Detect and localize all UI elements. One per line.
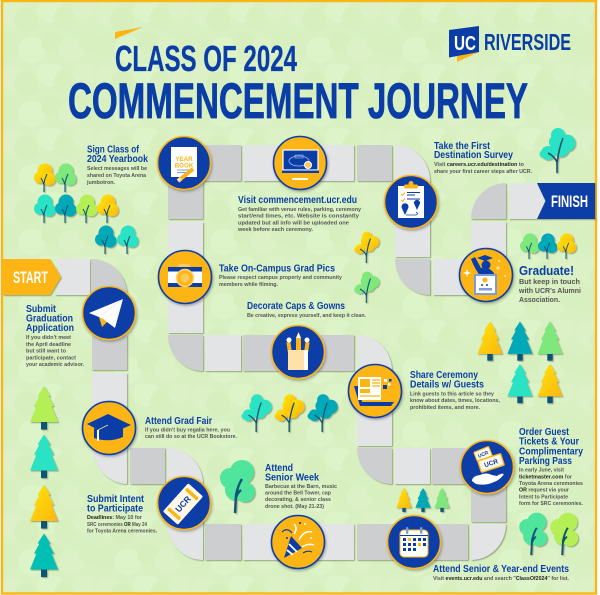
text: sign yearbook xyxy=(86,144,148,186)
title accent swoosh xyxy=(115,27,143,39)
text: attend senior week: drone shot. (May 21-23) xyxy=(265,504,324,510)
text: attend senior week: decorating, & senior class xyxy=(265,497,331,503)
tree: senior week xyxy=(220,460,255,513)
start banner: START xyxy=(13,269,48,287)
icon: yearbook: YEAR xyxy=(175,156,193,163)
text: submit graduation application: but still want to xyxy=(26,348,66,354)
finish banner xyxy=(537,183,595,219)
text: attend senior week: Barbecue at the Barn, music xyxy=(265,484,337,490)
text: sign yearbook: Sign Class of xyxy=(87,144,139,156)
text: share ceremony details: Share Ceremony xyxy=(410,369,478,381)
pine trees: small trio xyxy=(396,488,450,512)
icon: calendar xyxy=(388,516,440,568)
text: submit intent to participate: SRC ceremonies OR May 24 xyxy=(87,522,148,528)
trees: beside graduate xyxy=(520,233,576,259)
text: first destination survey: share your first career steps after UCR. xyxy=(434,169,532,175)
text: attend senior week xyxy=(265,462,337,510)
text: senior and year-end events: Visit events.ucr.edu and search "ClassOf2024" for list. xyxy=(433,576,569,582)
text: first destination survey: Visit careers.ucr.edu/destination to xyxy=(434,162,524,168)
icon: laptop with article xyxy=(348,364,402,418)
icon: pencils in cup xyxy=(272,326,324,378)
icon: tickets in hand: UCR xyxy=(477,450,490,460)
text: submit graduation application: Application xyxy=(26,322,74,334)
text: share ceremony details: prohibited items, and more. xyxy=(410,405,480,411)
text: on-campus grad pics xyxy=(219,262,343,288)
text: attend grad fair: Attend Grad Fair xyxy=(145,415,212,427)
icon: yearbook xyxy=(158,136,210,190)
text: first destination survey: Take the First xyxy=(434,140,490,152)
text: attend senior week: Senior Week xyxy=(265,472,319,484)
text: submit graduation application: participate, contact xyxy=(26,356,76,362)
text: order guest tickets: form for SRC ceremonies. xyxy=(519,501,583,507)
text: order guest tickets: Order Guest xyxy=(519,426,569,438)
text: sign yearbook: 2024 Yearbook xyxy=(87,153,148,165)
text: submit intent to participate: Deadlines: May 10 for xyxy=(87,515,143,521)
text: attend grad fair: If you didn't buy regalia here, you xyxy=(145,428,230,434)
text: visit website xyxy=(237,194,362,233)
icon: tickets in hand xyxy=(460,440,514,494)
text: submit graduation application xyxy=(26,303,84,368)
text: graduate: But keep in touch xyxy=(519,277,580,286)
text: order guest tickets xyxy=(519,426,583,507)
text: attend senior week: around the Bell Tower, cap xyxy=(265,490,331,496)
logo: UC Riverside: UC xyxy=(454,33,476,55)
icon: paper plane xyxy=(82,286,136,340)
pine trees: right grove xyxy=(477,322,563,403)
icon: graduation cap xyxy=(82,402,136,454)
text: sign yearbook: jumbotron. xyxy=(86,180,115,186)
logo: UC Riverside xyxy=(449,26,571,62)
text: share ceremony details xyxy=(410,369,500,411)
text: visit website: updated but all info will be uploaded one xyxy=(238,220,349,226)
text: order guest tickets: Parking Pass xyxy=(519,455,572,467)
title xyxy=(68,27,528,129)
text: sign yearbook: shared on Toyota Arena xyxy=(87,173,147,179)
start banner xyxy=(3,259,61,295)
text: order guest tickets: OR request via your xyxy=(519,488,570,494)
icon: graduate with diploma xyxy=(460,248,512,302)
text: submit intent to participate: for Toyota Arena ceremonies. xyxy=(87,528,157,534)
title line 1: CLASS OF 2024 xyxy=(115,38,297,79)
text: on-campus grad pics: Please respect campus property and community xyxy=(219,275,343,281)
icon: survey clipboard xyxy=(384,176,438,228)
trees: centre pair xyxy=(354,232,379,303)
broadleaf trees: top left grove xyxy=(34,164,138,254)
text: submit graduation application: Submit xyxy=(26,303,56,315)
text: attend grad fair xyxy=(145,415,237,440)
text: share ceremony details: Details w/ Guests xyxy=(410,378,484,390)
text: visit website: week before each ceremony. xyxy=(237,227,313,233)
text: on-campus grad pics: Take On-Campus Grad Pics xyxy=(219,262,335,274)
pine trees: left column xyxy=(30,386,58,577)
text: order guest tickets: Complimentary xyxy=(519,446,583,458)
text: senior and year-end events xyxy=(433,563,569,582)
text: decorate caps and gowns: Be creative, express yourself, and keep it clean. xyxy=(247,313,366,319)
icon: tickets in hand: UCR xyxy=(483,458,499,469)
text: decorate caps and gowns: Decorate Caps & Gowns xyxy=(247,300,345,312)
text: senior and year-end events: Attend Senior & Year-end Events xyxy=(433,563,569,575)
text: sign yearbook: Select messages will be xyxy=(87,166,147,172)
text: on-campus grad pics: members while filming. xyxy=(219,282,278,288)
text: attend grad fair: can still do so at the UCR Bookstore. xyxy=(145,434,237,440)
text: submit intent to participate xyxy=(87,493,157,534)
text: order guest tickets: Toyota Arena ceremonies xyxy=(519,481,583,487)
text: graduate xyxy=(518,263,581,304)
icon: website on monitor xyxy=(274,136,326,190)
text: share ceremony details: know about dates, times, locations, xyxy=(410,398,500,404)
icon: camera xyxy=(158,250,212,304)
text: submit intent to participate: Submit Intent xyxy=(87,493,144,505)
text: graduate: Graduate! xyxy=(519,263,574,278)
text: first destination survey: Destination Survey xyxy=(434,149,513,161)
text: order guest tickets: ticketmaster.com for xyxy=(519,474,573,480)
icon: event ticket: UCR xyxy=(173,494,193,514)
text: submit graduation application: Graduation xyxy=(26,312,73,324)
tree: top right xyxy=(540,128,576,173)
text: decorate caps and gowns xyxy=(247,300,366,319)
text: submit graduation application: the April deadline xyxy=(26,342,71,348)
text: visit website: start/end times, etc. Website is constantly xyxy=(238,214,360,220)
text: share ceremony details: Link guests to this article so they xyxy=(410,392,495,398)
text: visit website: Visit commencement.ucr.edu xyxy=(238,194,357,206)
text: order guest tickets: In early June, visit xyxy=(519,468,564,474)
trees: bottom right pair xyxy=(519,513,578,555)
text: graduate: with UCR's Alumni xyxy=(518,286,581,295)
text: order guest tickets: Intent to Participate xyxy=(519,494,568,500)
text: submit intent to participate: to Participate xyxy=(87,502,143,514)
trees: middle trio xyxy=(241,394,338,432)
text: attend senior week: Attend xyxy=(265,462,293,474)
text: graduate: Association. xyxy=(519,295,560,304)
text: order guest tickets: Tickets & Your xyxy=(519,436,579,448)
text: submit graduation application: If you didn't meet xyxy=(26,335,71,341)
icon: event ticket xyxy=(158,476,210,530)
icon: yearbook: BOOK xyxy=(175,162,194,170)
text: submit graduation application: your academic advisor. xyxy=(26,362,84,368)
board game path xyxy=(55,145,546,560)
text: visit website: Get familiar with venue rules, parking, ceremony xyxy=(238,207,362,213)
icon: confetti popper xyxy=(272,516,324,568)
text: first destination survey xyxy=(434,140,532,175)
